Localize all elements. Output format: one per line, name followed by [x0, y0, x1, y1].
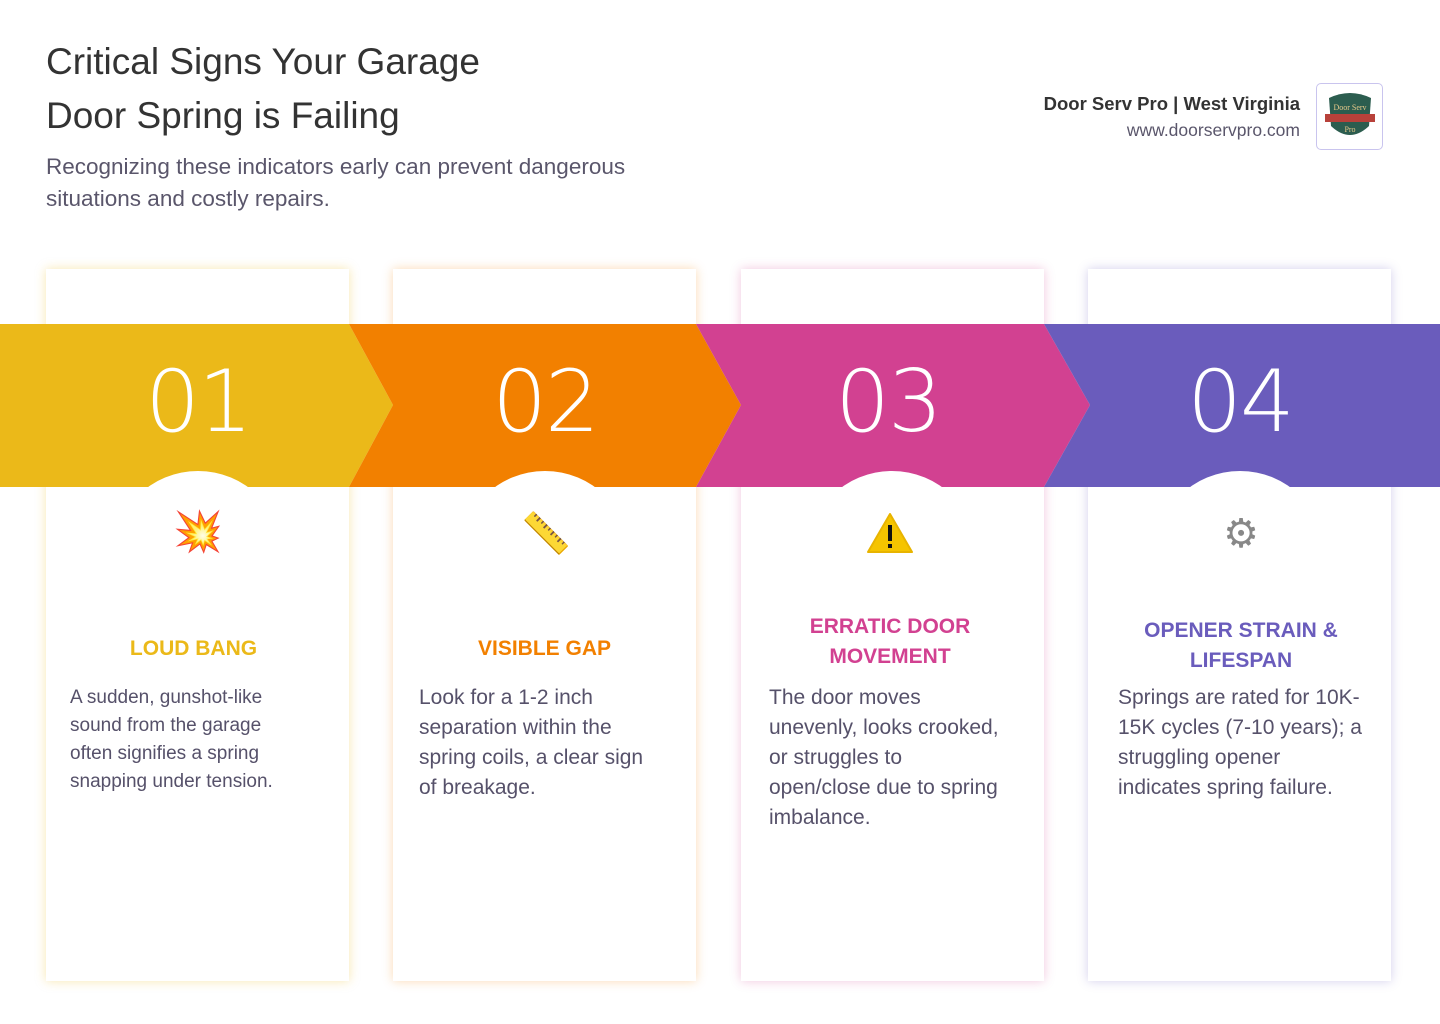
card 1	[46, 269, 349, 981]
heading 3	[810, 615, 970, 668]
heading 3: MOVEMENT	[829, 645, 951, 668]
title: Critical Signs Your Garage	[46, 41, 480, 82]
heading 4: LIFESPAN	[1190, 649, 1292, 672]
number 02: 02	[492, 352, 598, 452]
number 03: 03	[835, 352, 941, 452]
logo	[1316, 83, 1383, 150]
subtitle	[46, 154, 625, 211]
card 2	[393, 269, 696, 981]
logo: Door Serv	[1333, 103, 1367, 112]
text 1: A sudden, gunshot-like sound from the garage often signifies a spring snapping under tension.	[70, 687, 273, 792]
title	[46, 41, 480, 136]
logo: Pro	[1344, 125, 1356, 134]
card 4	[1088, 269, 1391, 981]
subtitle: situations and costly repairs.	[46, 186, 330, 211]
icon: warning	[867, 513, 913, 553]
text 3: imbalance.	[769, 806, 871, 829]
heading 4: OPENER STRAIN &	[1144, 619, 1338, 642]
number 04: 04	[1187, 352, 1293, 452]
text 3: or struggles to	[769, 746, 902, 769]
text 3: The door moves	[769, 686, 921, 709]
number 01: 01	[145, 352, 251, 452]
heading 4	[1144, 619, 1338, 672]
text 4: Springs are rated for 10K-15K cycles (7-10 years); a struggling opener indicates spring failure.	[1118, 686, 1362, 799]
subtitle: Recognizing these indicators early can prevent dangerous	[46, 154, 625, 179]
heading 1: LOUD BANG	[130, 637, 257, 660]
brand name: Door Serv Pro | West Virginia	[1044, 93, 1300, 114]
brand url: www.doorservpro.com	[1127, 120, 1300, 140]
text 3: open/close due to spring	[769, 776, 998, 799]
text 2: Look for a 1-2 inch separation within the spring coils, a clear sign of breakage.	[419, 686, 643, 799]
card 3	[741, 269, 1044, 981]
heading 2: VISIBLE GAP	[478, 637, 611, 660]
heading 3: ERRATIC DOOR	[810, 615, 970, 638]
text 3: unevenly, looks crooked,	[769, 716, 999, 739]
brand block	[1044, 83, 1383, 150]
text 3	[769, 686, 999, 829]
title: Door Spring is Failing	[46, 95, 400, 136]
icon: gear: ⚙	[1223, 511, 1259, 557]
icon: explosion: 💥	[173, 509, 223, 555]
icon: ruler: 📏	[521, 511, 571, 557]
